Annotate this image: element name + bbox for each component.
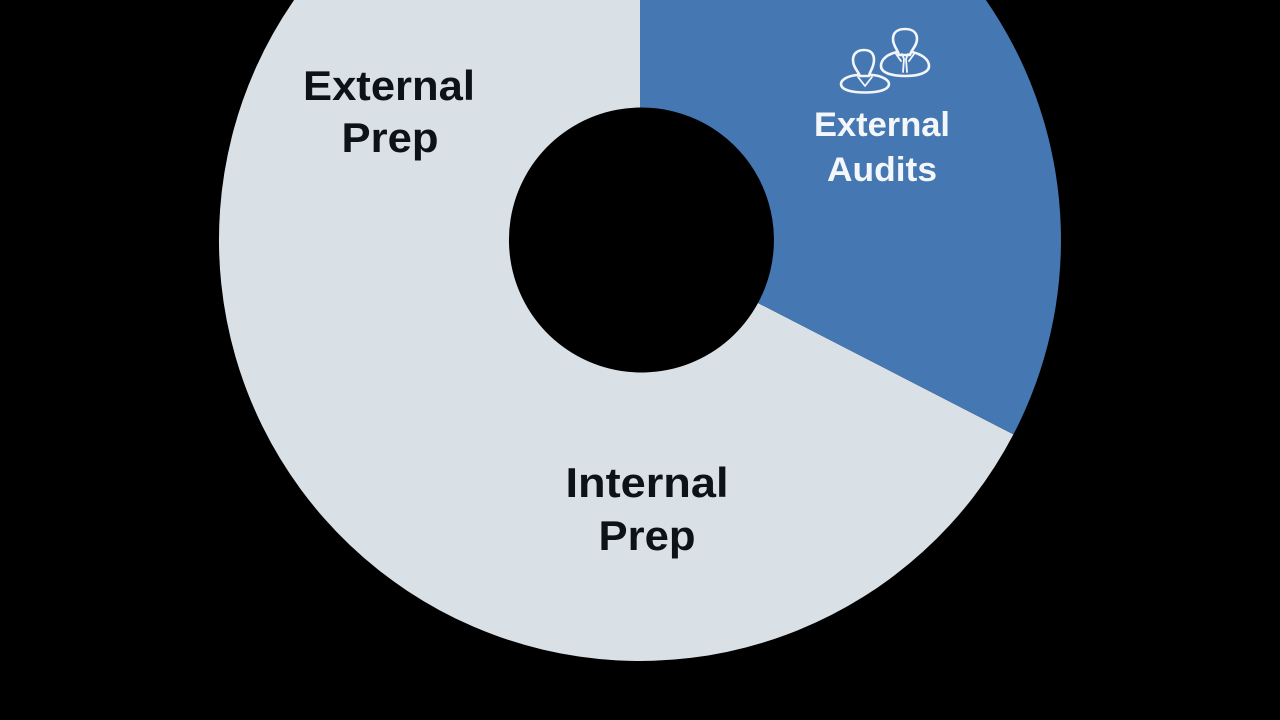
label: internal prep (566, 459, 728, 559)
label: external audits: External (814, 106, 950, 144)
label: external prep: External (303, 62, 475, 109)
donut segment: external audits (blue) (640, 0, 1061, 434)
icon: two auditors (841, 29, 929, 92)
label: external prep (303, 62, 475, 161)
label: external audits (814, 106, 950, 189)
icon: rear person (881, 29, 929, 76)
icon: front person (841, 50, 889, 92)
donut segment: prep (light grey) (219, 0, 1013, 661)
label: internal prep: Internal (566, 459, 728, 506)
label: internal prep: Prep (598, 512, 696, 559)
label: external prep: Prep (342, 114, 438, 161)
label: external audits: Audits (827, 151, 937, 189)
